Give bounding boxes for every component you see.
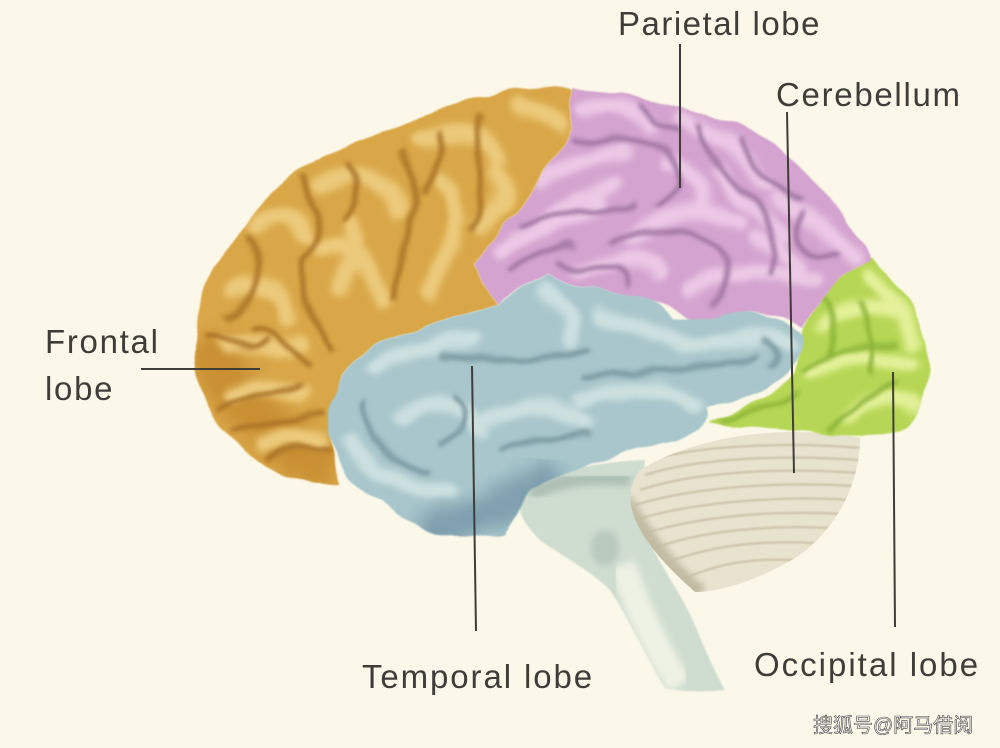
label: Temporal lobe: Temporal lobe (362, 658, 594, 695)
brain illustration (185, 80, 940, 691)
label: Frontal lobe: lobe (45, 370, 114, 407)
cerebellum (630, 432, 860, 592)
label: Frontal lobe (45, 323, 260, 407)
label: Occipital lobe: Occipital lobe (754, 646, 980, 683)
label: Cerebellum: Cerebellum (776, 76, 962, 113)
watermark: 搜狐号@阿马借阅 (813, 714, 973, 737)
brainstem (519, 460, 725, 691)
frontal lobe (185, 80, 580, 490)
label: Temporal lobe (362, 366, 594, 695)
label: Parietal lobe: Parietal lobe (618, 5, 821, 42)
label: Frontal lobe: Frontal (45, 323, 160, 360)
temporal lobe (327, 274, 805, 538)
label: Cerebellum (776, 76, 962, 473)
occipital lobe (708, 257, 932, 437)
parietal lobe (460, 80, 880, 330)
